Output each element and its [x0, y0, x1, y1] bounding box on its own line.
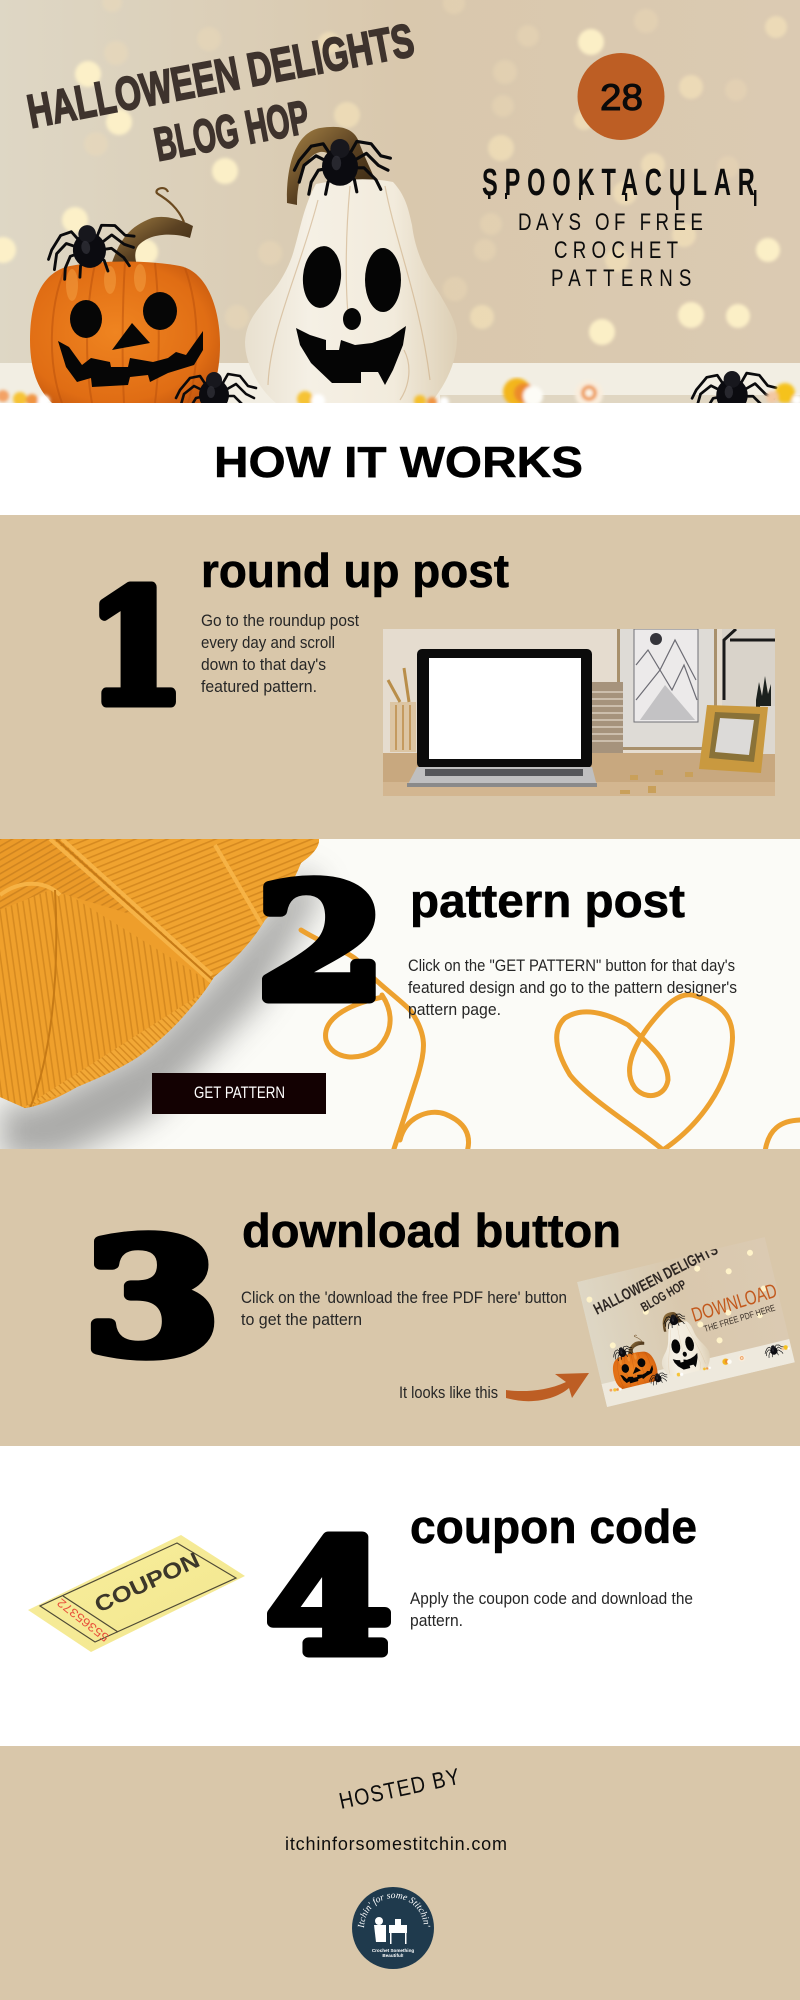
logo: [352, 1887, 434, 1969]
heading: download button: [242, 1204, 621, 1257]
floor spiders and candy corn: [0, 371, 800, 419]
image: coupon ticket: 55365372: [54, 1595, 112, 1645]
button: get pattern: [152, 1073, 326, 1114]
panel: step 3 download button: [0, 1149, 800, 1446]
arrow: [506, 1373, 589, 1401]
body text: [410, 1590, 693, 1630]
body text: Go to the roundup post: [201, 612, 359, 630]
black frame: [722, 629, 775, 706]
thumbnail: download image: [577, 1237, 795, 1407]
panel: footer: [0, 1746, 800, 2000]
body text: featured pattern.: [201, 678, 317, 696]
number 2: 2: [256, 851, 386, 1036]
body text: Apply the coupon code and download the: [410, 1590, 693, 1608]
jar: [592, 682, 623, 753]
title: Halloween Delights Blog Hop: [23, 13, 418, 171]
title: Halloween Delights Blog Hop: BLOG HOP: [150, 90, 313, 171]
white gourd ghost: [245, 127, 457, 403]
panel: step 1 round up post: [0, 515, 800, 839]
badge: 28: [578, 53, 664, 140]
heading: how it works: HOW IT WORKS: [214, 438, 583, 487]
pumpkin jack-o-lantern: [30, 188, 220, 403]
image: laptop on desk: [383, 629, 775, 796]
body text: [241, 1289, 567, 1329]
body text: Click on the "GET PATTERN" button for that day's: [408, 957, 735, 975]
body text: pattern page.: [408, 1001, 501, 1019]
mountain print: [617, 629, 717, 750]
heading: how it works: [0, 403, 800, 515]
badge: 28: 28: [600, 77, 643, 118]
text: days of free crochet patterns: DAYS OF FREE: [518, 209, 703, 236]
shelf: [0, 363, 800, 403]
yarn ball: [0, 839, 330, 1119]
bokeh lights: [0, 0, 787, 345]
text: hosted by: HOSTED BY: [337, 1764, 462, 1814]
gold frame: [699, 705, 768, 773]
pencil cup: [390, 702, 416, 752]
text: website: itchinforsomestitchin.com: [285, 1834, 507, 1854]
ball shadow: [0, 870, 322, 1160]
number 1: 1: [87, 556, 185, 739]
panel: step 4 coupon code: [0, 1446, 800, 1746]
body text: pattern.: [410, 1612, 463, 1630]
thumbnail: download image: BLOG HOP: [638, 1276, 689, 1315]
thumbnail: download image: THE FREE PDF HERE: [703, 1303, 776, 1334]
body text: every day and scroll: [201, 634, 335, 652]
text: days of free crochet patterns: CROCHET: [554, 237, 678, 264]
logo: Crochet Something: [372, 1948, 414, 1953]
button: get pattern: GET PATTERN: [194, 1083, 285, 1102]
thumbnail: download image: HALLOWEEN DELIGHTS: [591, 1241, 721, 1319]
logo: Beautiful!: [382, 1953, 404, 1958]
yarn strands: [301, 930, 800, 1152]
body text: featured design and go to the pattern designer's: [408, 979, 737, 997]
body text: [201, 612, 359, 696]
heading: round up post: [201, 544, 509, 597]
heading: pattern post: [410, 874, 685, 927]
text: days of free crochet patterns: PATTERNS: [551, 265, 691, 292]
panel: step 2 pattern post: [0, 839, 800, 1160]
logo: Itchin' for some Stitchin': [358, 1894, 430, 1928]
body text: to get the pattern: [241, 1311, 362, 1329]
text: days of free crochet patterns: [518, 209, 703, 292]
heading: coupon code: [410, 1500, 697, 1553]
text: Spooktacular: SPOOKTACULAR: [482, 160, 755, 203]
image: coupon ticket: [28, 1535, 245, 1652]
laptop: [417, 649, 592, 768]
caption: It looks like this: [399, 1384, 498, 1402]
body text: Click on the 'download the free PDF here' button: [241, 1289, 567, 1307]
image: coupon ticket: COUPON: [91, 1547, 204, 1618]
number 4: 4: [266, 1506, 392, 1689]
body text: down to that day's: [201, 656, 326, 674]
body text: [408, 957, 737, 1019]
number 3: 3: [84, 1206, 220, 1391]
panel: hero banner: [0, 0, 800, 419]
